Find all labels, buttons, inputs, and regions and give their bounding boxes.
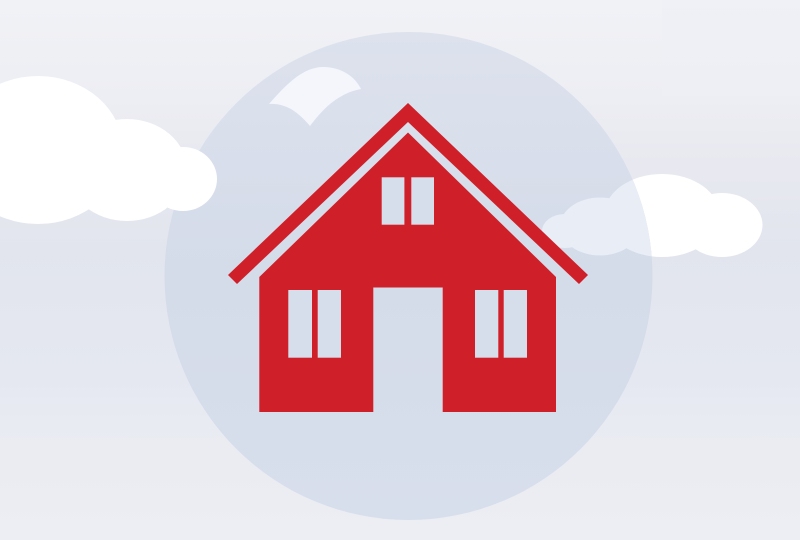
left windows bbox=[288, 290, 341, 358]
cloud: left bbox=[0, 76, 217, 224]
right windows bbox=[475, 290, 527, 358]
house bbox=[228, 103, 588, 412]
bubble highlight bbox=[269, 67, 361, 126]
cloud: right, seen through bubble bbox=[542, 180, 652, 256]
bubble bbox=[164, 32, 652, 520]
attic windows bbox=[382, 177, 434, 225]
house body with door opening bbox=[259, 132, 556, 412]
roof bbox=[228, 103, 588, 284]
cloud: right, behind bubble bbox=[542, 174, 762, 257]
background: pale corner panel bbox=[662, 0, 800, 96]
